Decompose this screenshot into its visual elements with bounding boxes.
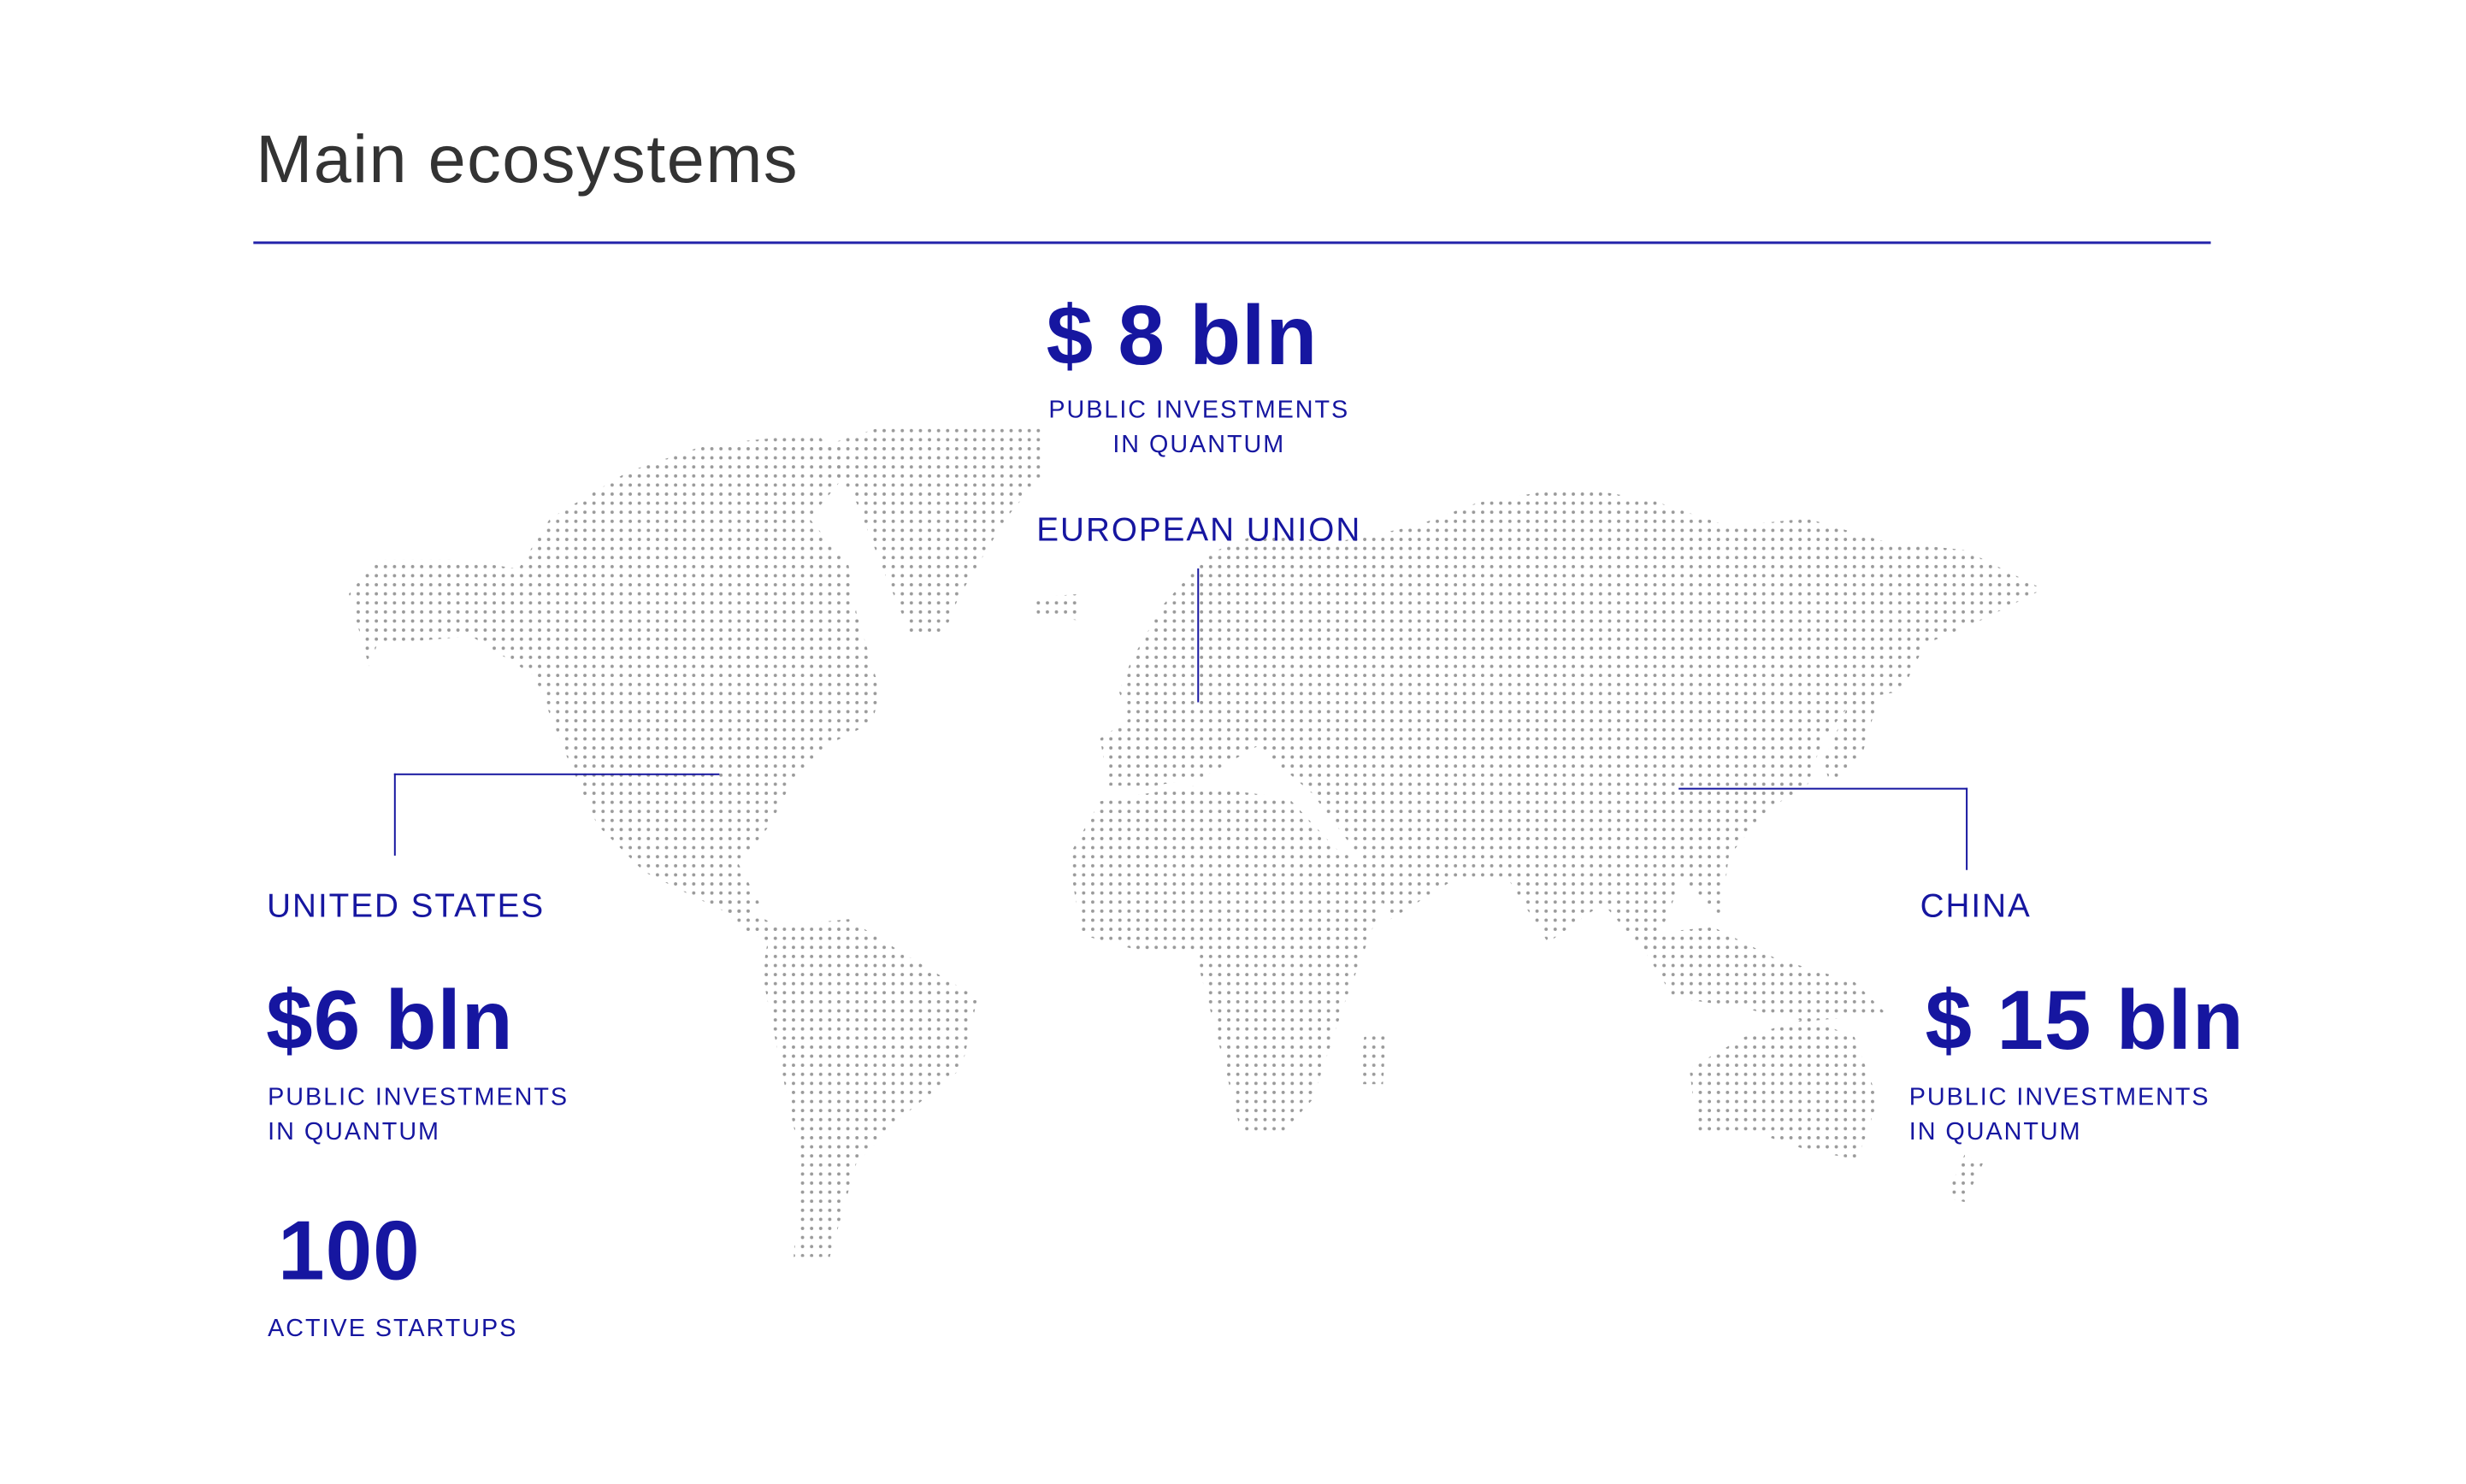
japan — [1823, 692, 1878, 786]
new zealand — [1945, 1155, 1984, 1202]
connector: china — [1678, 788, 1967, 870]
china label: IN QUANTUM — [1909, 1118, 2082, 1145]
connector: united states — [394, 774, 719, 856]
panel: european union — [1036, 288, 1361, 703]
eu region name: EUROPEAN UNION — [1036, 512, 1361, 548]
eu label — [1048, 397, 1349, 458]
us label: PUBLIC INVESTMENTS — [268, 1083, 569, 1110]
madagascar — [1360, 1033, 1386, 1084]
china label: PUBLIC INVESTMENTS — [1909, 1083, 2210, 1110]
eu value: $ 8 bln — [1047, 288, 1318, 382]
title: Main ecosystems — [256, 121, 799, 197]
iceland — [1034, 594, 1082, 621]
north america — [349, 433, 880, 915]
us value: $6 bln — [266, 973, 514, 1067]
eu connector line — [1197, 568, 1199, 703]
eurasia — [1100, 487, 2043, 958]
south america — [762, 919, 977, 1257]
panel: united states — [266, 888, 569, 1342]
china label — [1909, 1083, 2210, 1145]
panel: china — [1909, 888, 2245, 1145]
startups label: ACTIVE STARTUPS — [268, 1315, 517, 1342]
greenland — [817, 424, 1045, 636]
startups value: 100 — [278, 1203, 421, 1297]
se asia islands — [1634, 927, 1886, 1022]
eu label: IN QUANTUM — [1112, 431, 1285, 458]
us region name: UNITED STATES — [267, 888, 545, 924]
header rule — [253, 241, 2211, 244]
china region name: CHINA — [1920, 888, 2032, 924]
central america — [707, 892, 778, 943]
us label — [268, 1083, 569, 1145]
africa — [1069, 786, 1391, 1134]
australia — [1690, 1018, 1878, 1159]
us label: IN QUANTUM — [268, 1118, 440, 1145]
china value: $ 15 bln — [1926, 973, 2245, 1067]
eu label: PUBLIC INVESTMENTS — [1048, 397, 1349, 424]
